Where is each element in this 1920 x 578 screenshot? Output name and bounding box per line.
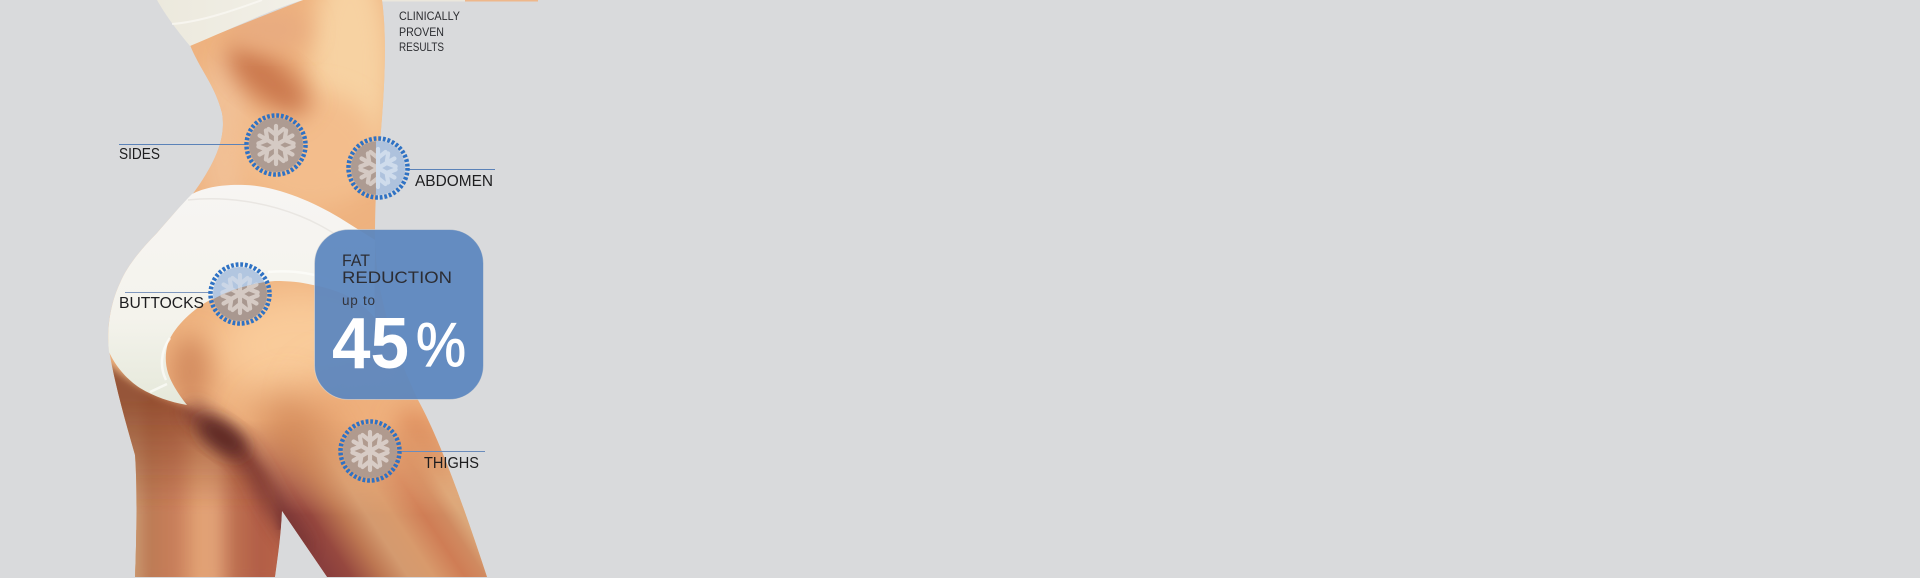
crease shade [195,412,300,545]
text: clinically proven results: PROVEN [399,27,444,39]
text: clinically proven results: CLINICALLY [399,11,460,23]
label line: sides [119,144,246,146]
callout figure: 45 [332,304,409,384]
skin tones [100,0,500,577]
callout heading: REDUCTION [342,268,452,287]
icon: buttocks cooling spot [210,264,270,324]
label line: buttocks [125,292,210,294]
label: buttocks: BUTTOCKS [119,295,204,312]
label line: thighs [402,450,485,452]
label: sides: SIDES [119,146,160,163]
label: abdomen: ABDOMEN [415,173,493,190]
crop top seam [172,0,262,24]
callout: fat reduction up to 45% [314,230,484,400]
callout heading [342,251,452,287]
left leg top shade [112,362,246,500]
callout subheading: up to [342,293,375,308]
briefs leg seam [150,271,330,392]
label line: abdomen [408,168,495,170]
callout heading: FAT [342,251,370,270]
body figure [100,0,500,577]
icon: abdomen cooling spot [348,138,408,198]
briefs waistband seam [188,199,335,234]
text: clinically proven results [399,11,460,54]
white briefs [108,185,375,405]
top edge strip of arm [382,0,538,2]
right thigh bands [240,428,487,577]
left leg [112,364,281,573]
left leg base [130,530,282,577]
infographic canvas [108,0,538,577]
icon: sides cooling spot [246,116,306,174]
text: clinically proven results: RESULTS [399,42,444,54]
label: thighs: THIGHS [424,455,479,472]
callout percent sign: % [416,311,466,380]
callout panel [314,230,484,400]
crop top [157,0,303,46]
icon: thighs cooling spot [340,422,400,480]
gap between legs edge [275,511,327,577]
